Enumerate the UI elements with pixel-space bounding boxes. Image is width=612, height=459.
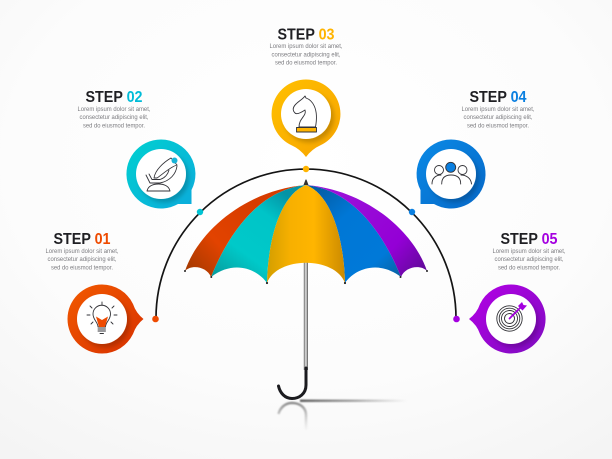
step 05 text: Lorem ipsum dolor sit amet, — [492, 248, 566, 255]
step 05 text — [492, 231, 566, 272]
step 03 text: sed do eiusmod tempor. — [275, 60, 337, 66]
step 05 text: consectetur adipiscing elit, — [494, 256, 564, 263]
step 04 text — [462, 89, 535, 130]
icon: target — [497, 302, 527, 331]
step 02 text: sed do eiusmod tempor. — [83, 122, 145, 130]
step 02 text: STEP 02 — [86, 89, 142, 106]
icon: light bulb — [87, 302, 117, 334]
step 01 text: sed do eiusmod tempor. — [51, 264, 113, 272]
step 02 text — [78, 89, 151, 130]
step 01 text: consectetur adipiscing elit, — [48, 256, 117, 263]
umbrella panel: blue — [306, 185, 401, 283]
step 01 text: Lorem ipsum dolor sit amet, — [46, 248, 119, 255]
step 04 pin — [417, 139, 486, 208]
step 03 text: STEP 03 — [278, 26, 335, 44]
step 05 pin — [469, 284, 546, 353]
icon: microscope — [146, 158, 178, 191]
umbrella panel: red — [185, 185, 306, 277]
step 05 text: sed do eiusmod tempor. — [498, 264, 560, 272]
umbrella rib tips — [184, 270, 428, 284]
ground shadow — [300, 400, 408, 402]
step 02 text: consectetur adipiscing elit, — [80, 114, 149, 121]
step 03 text: consectetur adipiscing elit, — [272, 52, 341, 58]
handle reflection — [278, 403, 306, 430]
step 03 text — [270, 26, 343, 66]
umbrella panel: purple — [306, 185, 427, 277]
timeline arc — [152, 166, 460, 322]
umbrella ferrule — [304, 180, 308, 185]
step 03 text: Lorem ipsum dolor sit amet, — [270, 43, 343, 50]
umbrella — [184, 180, 428, 398]
step 02 pin — [126, 139, 195, 208]
step 04 text: sed do eiusmod tempor. — [467, 122, 529, 130]
umbrella shaft — [304, 258, 308, 370]
icon: chess knight — [293, 96, 316, 132]
step 01 text: STEP 01 — [54, 231, 111, 248]
step 02 text: Lorem ipsum dolor sit amet, — [78, 106, 151, 113]
umbrella panel: teal — [211, 185, 306, 283]
umbrella panel: yellow — [267, 185, 345, 283]
step 01 pin — [68, 284, 144, 354]
step 03 pin — [272, 80, 340, 157]
step 04 text: consectetur adipiscing elit, — [464, 114, 533, 121]
step 04 text: STEP 04 — [470, 89, 527, 106]
umbrella handle — [278, 368, 306, 398]
step 05 text: STEP 05 — [500, 231, 558, 248]
icon: team — [432, 162, 472, 184]
step 04 text: Lorem ipsum dolor sit amet, — [462, 106, 535, 113]
step 01 text — [46, 231, 119, 272]
